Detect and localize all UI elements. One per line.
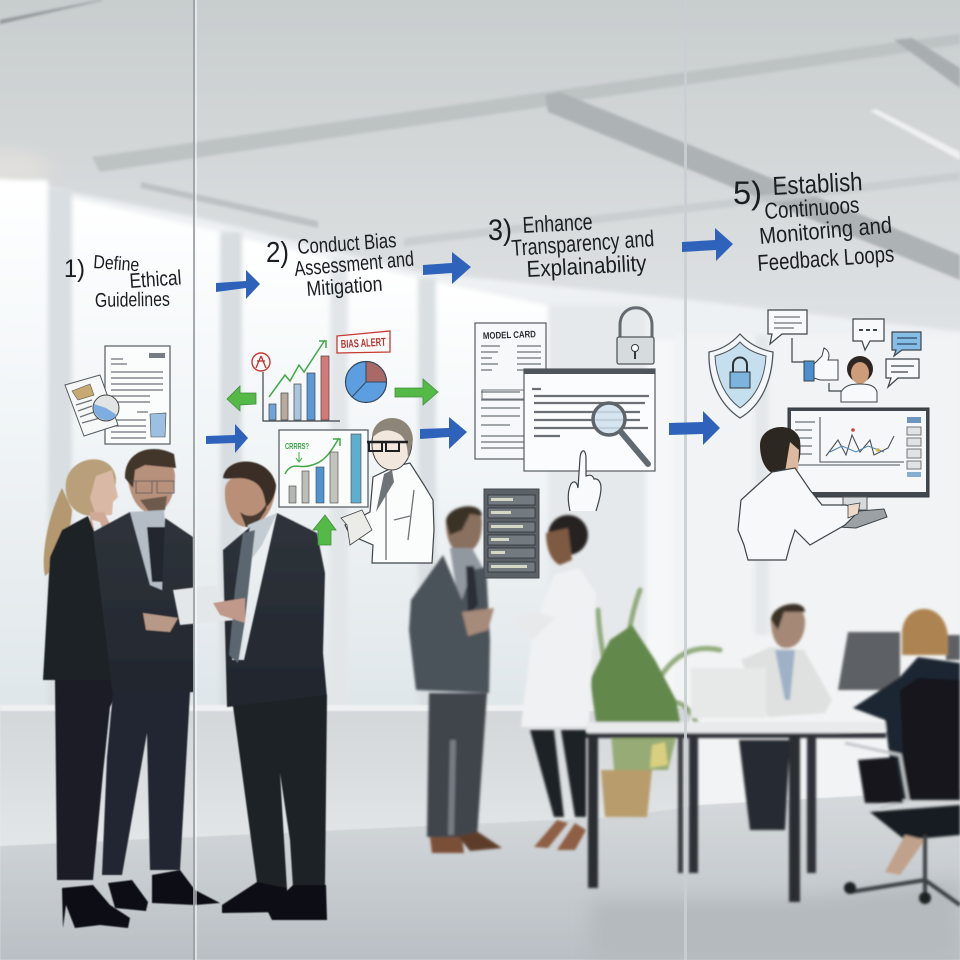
bias alert tag: BIAS ALERT (341, 337, 386, 351)
heading: step 2: Mitigation (306, 273, 383, 301)
blue bubble (892, 332, 921, 356)
heading: step 1 (64, 252, 182, 312)
stand and keyboard (843, 497, 867, 510)
ceiling (0, 0, 960, 335)
arrow 1 to 2 top (216, 270, 260, 299)
window wall (0, 180, 960, 810)
main document (105, 346, 170, 444)
heading: step 1: Ethical (129, 266, 182, 293)
ceiling beams (0, 0, 960, 280)
heading: step 2: Conduct Bias (297, 229, 397, 259)
thumbs up (814, 348, 838, 380)
illustration: scientist with chart: CRRRS? (285, 441, 309, 451)
monitor behind (838, 632, 960, 690)
heading: step 5: Feedback Loops (757, 240, 895, 276)
illustration: feedback and speech bubbles (768, 310, 921, 402)
table (586, 722, 898, 902)
glass panel lines (193, 0, 687, 960)
heading: step 1: Define (93, 252, 140, 276)
icon: padlock (617, 308, 654, 364)
illustration: guidelines documents (65, 346, 170, 444)
pointing hand (568, 451, 601, 511)
monitor chart (791, 417, 904, 465)
lab coat (345, 463, 434, 563)
scientist head (372, 422, 412, 470)
wall below window (0, 708, 690, 848)
arrow 2 to 3 top (423, 252, 471, 284)
foreground man in suit (173, 462, 327, 920)
hand and device (341, 510, 372, 545)
foreground man with glasses (93, 449, 220, 911)
bubble (853, 319, 884, 350)
heading: step 2 (266, 229, 415, 301)
axes (263, 372, 340, 421)
heading: step 3: Explainability (526, 250, 648, 282)
heading: step 3: Transparency and (511, 225, 655, 261)
illustration: scientist with chart (279, 418, 434, 563)
bias icon (252, 353, 270, 371)
monitor sidebar (907, 417, 921, 423)
heading: step 5: 5) (733, 175, 762, 211)
small sheet (65, 375, 118, 436)
heading: step 2: Assessment and (293, 248, 415, 281)
monitor (788, 408, 929, 497)
illustration: document window with magnifier and pointing hand (524, 369, 655, 511)
plant (590, 590, 720, 817)
avatar (847, 356, 873, 382)
heading: step 5 (733, 166, 895, 276)
heading: step 2: 2) (266, 237, 289, 269)
analyst (760, 427, 800, 475)
heading: step 3: 3) (488, 214, 512, 247)
trend line (269, 340, 326, 397)
arrow 3 to 5 top (682, 228, 733, 261)
connector (792, 338, 806, 362)
pie chart (346, 362, 386, 402)
heading: step 5: Continuoos (764, 191, 860, 224)
illustration: security shield (709, 334, 773, 418)
foreground businesswoman (43, 459, 183, 928)
right arrow (395, 379, 438, 405)
heading: step 1: Guidelines (95, 289, 170, 312)
heading: step 5: Establish (772, 166, 863, 201)
up arrow (313, 515, 336, 545)
standing man in suit (409, 506, 502, 853)
bubble (886, 359, 919, 387)
papers (173, 585, 233, 625)
seated woman in chair (844, 609, 960, 905)
arrow 1 to 2 lower (206, 424, 248, 453)
arrow 3 to 5 lower (669, 411, 720, 445)
bars (269, 404, 276, 420)
floor (0, 790, 960, 960)
heading: step 5: Monitoring and (758, 211, 893, 249)
speech bubble large (768, 310, 807, 344)
heading: step 3: Enhance (522, 208, 593, 238)
woman in lab coat (510, 515, 596, 850)
chart board (279, 430, 368, 507)
blurred background scene (409, 506, 960, 905)
seated man at laptop (691, 604, 832, 830)
arrow 2 to 3 lower (420, 417, 467, 449)
left arrow (227, 386, 256, 411)
illustration: server rack (484, 489, 539, 578)
small pie (93, 395, 119, 421)
illustration: analyst at monitor (738, 408, 929, 560)
illustration: bias charts (252, 331, 390, 421)
green arrows (227, 379, 438, 545)
illustration: model card (475, 323, 546, 459)
magnifier (593, 403, 648, 464)
illustration: model card: MODEL CARD (483, 329, 536, 342)
heading: step 3 (488, 208, 655, 282)
heading: step 1: 1) (64, 255, 85, 283)
blue arrows (206, 228, 733, 453)
